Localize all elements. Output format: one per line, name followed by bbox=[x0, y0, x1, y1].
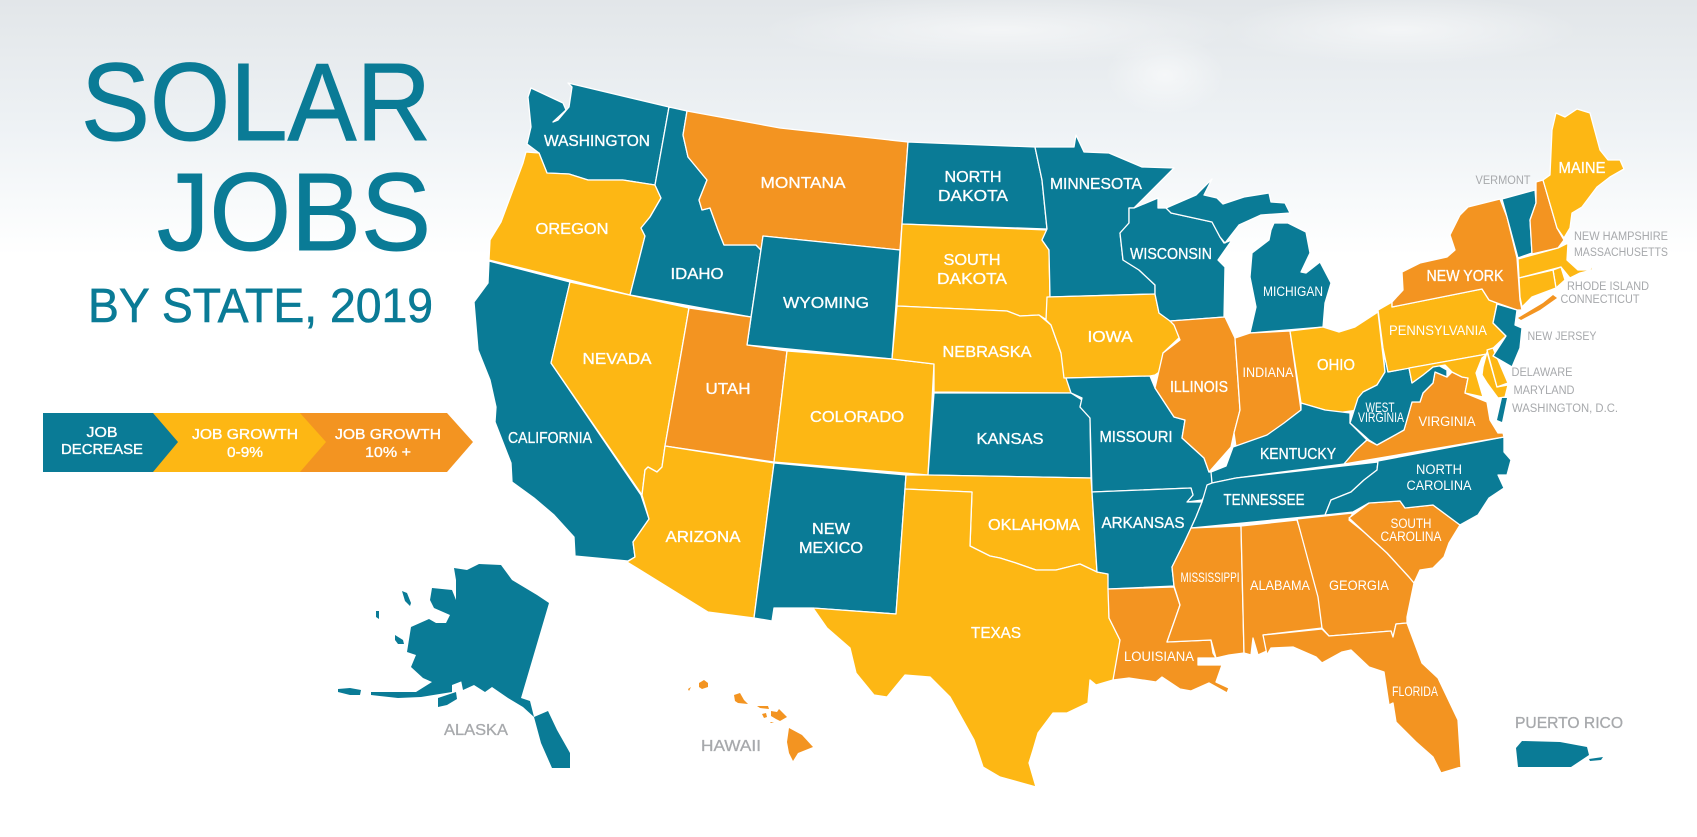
state: New Mexico: NEW bbox=[812, 521, 850, 538]
state: Idaho: IDAHO bbox=[670, 266, 724, 283]
state: Wyoming: WYOMING bbox=[783, 295, 869, 312]
legend item: job growth 10% +: JOB GROWTH bbox=[335, 427, 441, 443]
state: Massachusetts bbox=[1518, 243, 1592, 278]
state: South Dakota: SOUTH bbox=[944, 252, 1000, 269]
labels: small northeastern states: NEW JERSEY bbox=[1528, 331, 1597, 343]
state: South Carolina: CAROLINA bbox=[1380, 529, 1442, 544]
state: Nevada: NEVADA bbox=[582, 351, 652, 368]
state: Missouri: MISSOURI bbox=[1100, 429, 1172, 446]
labels: small northeastern states: WASHINGTON, D.C. bbox=[1512, 403, 1618, 415]
state: Oregon bbox=[489, 152, 661, 295]
state: California: CALIFORNIA bbox=[508, 430, 593, 447]
state: Maryland bbox=[1409, 352, 1508, 398]
state: Colorado bbox=[774, 351, 934, 475]
state: New Mexico bbox=[754, 463, 906, 621]
state: Mississippi: MISSISSIPPI bbox=[1180, 570, 1240, 585]
labels: small northeastern states: VERMONT bbox=[1476, 175, 1530, 187]
state: Pennsylvania bbox=[1378, 289, 1506, 372]
state: North Dakota: DAKOTA bbox=[938, 188, 1009, 205]
labels: small northeastern states: DELAWARE bbox=[1512, 367, 1573, 379]
state: New Hampshire bbox=[1530, 180, 1564, 254]
state: Arkansas: ARKANSAS bbox=[1102, 515, 1184, 532]
legend: job change categories bbox=[43, 413, 473, 472]
map: United States by state bbox=[338, 83, 1624, 787]
state: Washington bbox=[527, 83, 669, 185]
state: Maine: MAINE bbox=[1558, 160, 1606, 177]
state: South Dakota bbox=[897, 224, 1050, 320]
state: Nebraska: NEBRASKA bbox=[942, 344, 1032, 361]
state: Alabama bbox=[1241, 520, 1322, 655]
state: Montana: MONTANA bbox=[760, 175, 846, 192]
state: Arizona: ARIZONA bbox=[666, 529, 741, 546]
state: North Carolina: NORTH bbox=[1416, 462, 1462, 477]
state: Nevada bbox=[551, 282, 689, 495]
state: Minnesota: MINNESOTA bbox=[1050, 176, 1143, 193]
state: Florida bbox=[1263, 623, 1461, 773]
state: Georgia: GEORGIA bbox=[1329, 578, 1389, 593]
label: Alaska: ALASKA bbox=[444, 722, 509, 739]
state: Mississippi bbox=[1167, 526, 1244, 658]
state: Utah: UTAH bbox=[706, 381, 750, 398]
state: Virginia: VIRGINIA bbox=[1418, 414, 1476, 429]
state: Iowa bbox=[1046, 294, 1180, 378]
state: Vermont bbox=[1502, 190, 1536, 258]
state: Utah bbox=[665, 308, 787, 462]
state: Illinois: ILLINOIS bbox=[1170, 379, 1228, 396]
state: Washington: WASHINGTON bbox=[544, 133, 650, 150]
state: West Virginia: VIRGINIA bbox=[1358, 410, 1404, 425]
state: Maine bbox=[1543, 109, 1624, 238]
state: Kansas: KANSAS bbox=[976, 431, 1044, 448]
state: New Jersey bbox=[1493, 304, 1522, 367]
state: Indiana bbox=[1234, 331, 1301, 447]
labels: small northeastern states: NEW HAMPSHIRE bbox=[1574, 231, 1668, 243]
state: Minnesota bbox=[1035, 135, 1174, 297]
state: Kansas bbox=[928, 393, 1091, 478]
legend item: job growth 0-9%: 0-9% bbox=[227, 445, 263, 461]
state: Tennessee bbox=[1191, 462, 1378, 528]
legend item: job decrease: JOB bbox=[86, 425, 118, 441]
state: Arkansas bbox=[1092, 488, 1202, 589]
title: Solar Jobs by State, 2019: BY STATE, 2019 bbox=[88, 280, 433, 333]
legend item: job growth 10% +: 10% + bbox=[365, 445, 411, 461]
state: South Dakota: DAKOTA bbox=[937, 271, 1008, 288]
state: California bbox=[474, 261, 649, 561]
labels: small northeastern states bbox=[1476, 175, 1668, 415]
title: Solar Jobs by State, 2019: JOBS bbox=[157, 151, 431, 274]
state: Texas: TEXAS bbox=[971, 625, 1021, 642]
labels: small northeastern states: RHODE ISLAND bbox=[1567, 281, 1649, 293]
state: Puerto Rico bbox=[1516, 741, 1603, 767]
state: Colorado: COLORADO bbox=[810, 409, 904, 426]
state: Michigan: MICHIGAN bbox=[1263, 284, 1323, 299]
state: Idaho bbox=[630, 107, 761, 317]
state: Florida: FLORIDA bbox=[1392, 684, 1438, 699]
state: Alaska bbox=[338, 564, 570, 768]
state: Kentucky bbox=[1211, 403, 1367, 483]
state: Wyoming bbox=[747, 236, 900, 359]
legend item: job growth 0-9% bbox=[135, 413, 326, 472]
state: Missouri bbox=[1066, 376, 1212, 502]
state: Indiana: INDIANA bbox=[1242, 365, 1294, 380]
state: North Carolina: CAROLINA bbox=[1406, 478, 1472, 493]
state: Connecticut bbox=[1519, 270, 1556, 307]
state: New York bbox=[1392, 199, 1557, 320]
state: Wisconsin: WISCONSIN bbox=[1130, 246, 1212, 263]
state: Oregon: OREGON bbox=[536, 221, 608, 238]
labels: small northeastern states: CONNECTICUT bbox=[1560, 294, 1640, 306]
state: Montana bbox=[683, 111, 908, 250]
state: Hawaii bbox=[688, 680, 813, 761]
state: Illinois bbox=[1155, 317, 1240, 472]
state: Oklahoma bbox=[905, 475, 1097, 572]
state: Arizona bbox=[627, 446, 774, 618]
label: Puerto Rico: PUERTO RICO bbox=[1515, 715, 1623, 732]
state: Virginia eastern shore bbox=[1497, 398, 1507, 422]
legend item: job decrease: DECREASE bbox=[61, 442, 143, 458]
state: North Carolina bbox=[1325, 437, 1511, 525]
legend item: job decrease bbox=[43, 413, 178, 472]
state: Delaware bbox=[1487, 348, 1508, 387]
state: Nebraska bbox=[892, 306, 1071, 393]
state: Virginia bbox=[1344, 372, 1504, 464]
state: Kentucky: KENTUCKY bbox=[1260, 446, 1336, 463]
title: Solar Jobs by State, 2019 bbox=[81, 41, 433, 333]
state: North Dakota bbox=[902, 142, 1047, 229]
state: Alabama: ALABAMA bbox=[1250, 578, 1310, 593]
state: West Virginia: WEST bbox=[1366, 400, 1394, 415]
state: Iowa: IOWA bbox=[1088, 329, 1133, 346]
labels: small northeastern states: MARYLAND bbox=[1514, 385, 1574, 397]
state: Texas bbox=[813, 489, 1120, 787]
state: New Mexico: MEXICO bbox=[799, 540, 863, 557]
legend item: job growth 10% + bbox=[280, 413, 473, 472]
state: Georgia bbox=[1297, 513, 1414, 637]
labels: small northeastern states: MASSACHUSETTS bbox=[1574, 247, 1668, 259]
state: Louisiana: LOUISIANA bbox=[1124, 649, 1194, 664]
state: Wisconsin bbox=[1120, 198, 1232, 321]
legend item: job growth 0-9%: JOB GROWTH bbox=[192, 427, 298, 443]
label: Hawaii: HAWAII bbox=[701, 738, 761, 755]
state: Ohio bbox=[1290, 312, 1385, 413]
state: South Carolina: SOUTH bbox=[1390, 516, 1432, 531]
state: West Virginia bbox=[1350, 348, 1447, 445]
title: Solar Jobs by State, 2019: SOLAR bbox=[81, 41, 431, 164]
state: Rhode Island bbox=[1553, 267, 1565, 288]
state: New York: NEW YORK bbox=[1426, 268, 1504, 285]
state: North Dakota: NORTH bbox=[944, 169, 1002, 186]
state: South Carolina bbox=[1349, 501, 1460, 583]
state: Pennsylvania: PENNSYLVANIA bbox=[1389, 323, 1487, 338]
state: Oklahoma: OKLAHOMA bbox=[988, 517, 1081, 534]
state: Ohio: OHIO bbox=[1317, 357, 1355, 374]
state: Louisiana bbox=[1108, 587, 1229, 693]
state: Michigan bbox=[1166, 179, 1331, 333]
state: Tennessee: TENNESSEE bbox=[1224, 492, 1304, 509]
